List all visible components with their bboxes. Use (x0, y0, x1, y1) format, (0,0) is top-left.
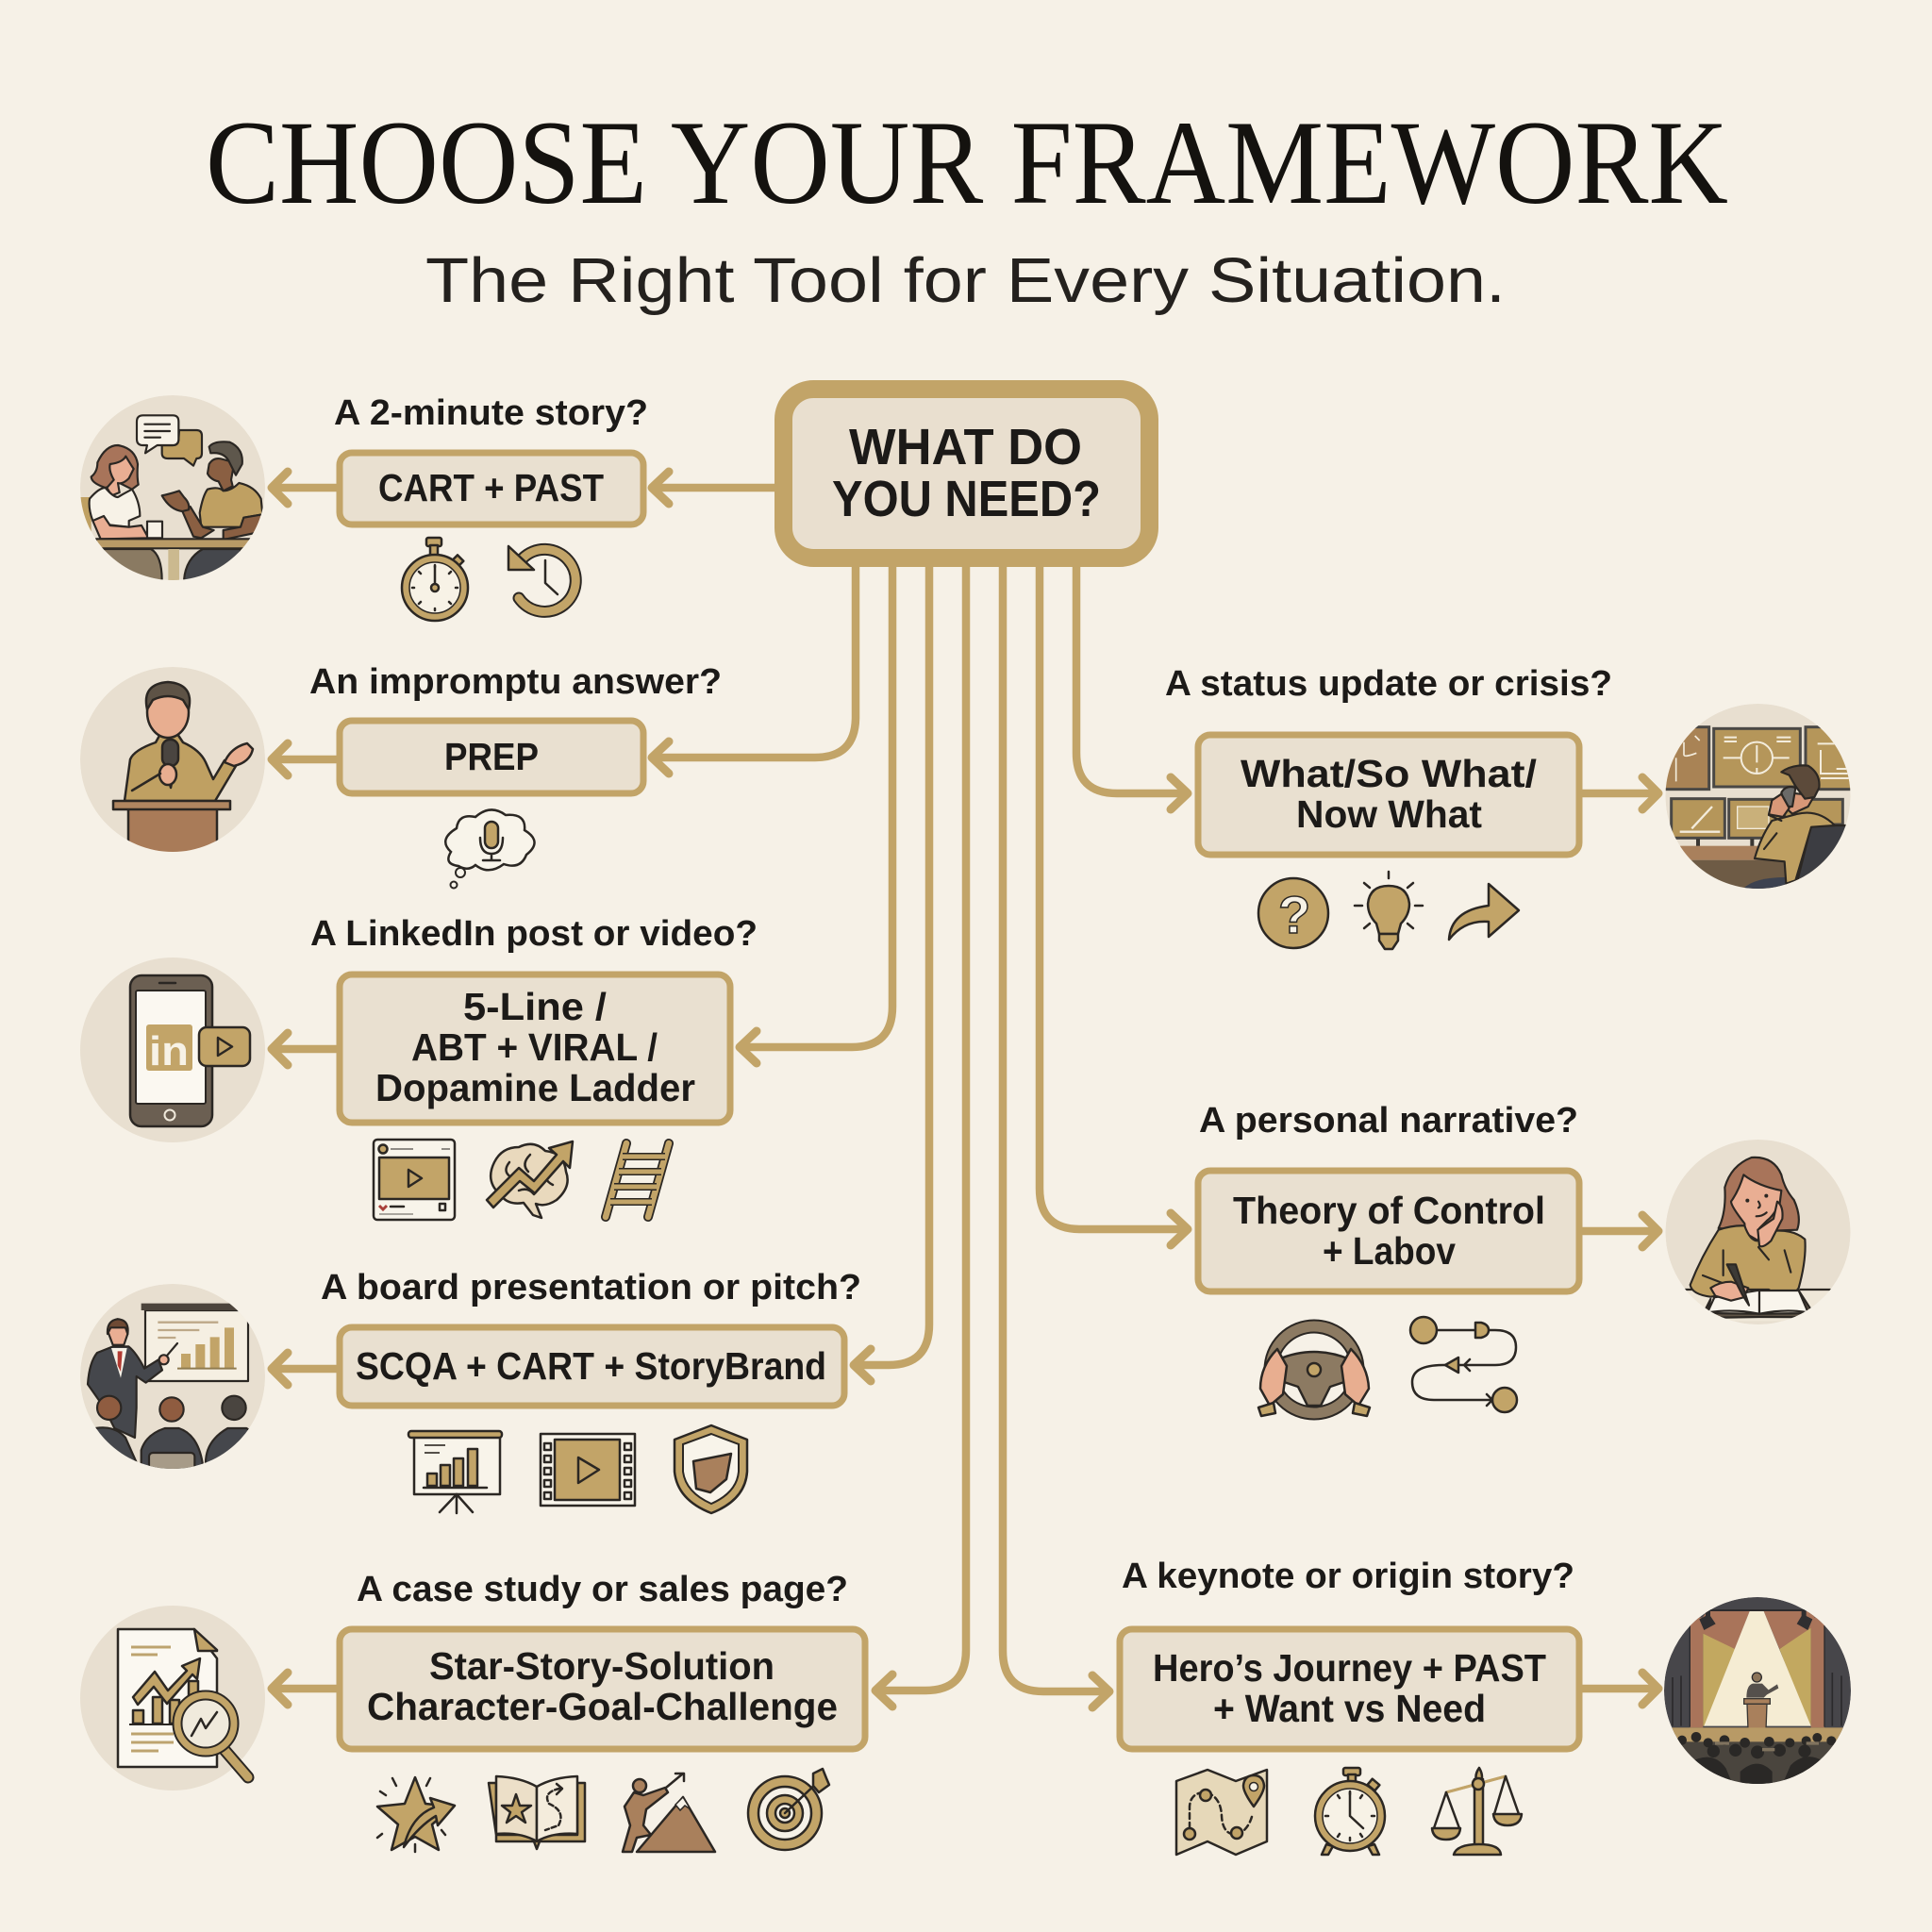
icon: ladder (606, 1143, 669, 1217)
icon: stopwatch (402, 538, 468, 621)
panel: LinkedIn post or video (80, 914, 758, 1220)
icon: question mark (1258, 878, 1328, 948)
icon: curved forward arrow (1449, 884, 1519, 940)
framework box: + Labov (1323, 1229, 1456, 1273)
framework box (1198, 1171, 1579, 1291)
icon: light bulb (1355, 872, 1423, 949)
question label: A keynote or origin story? (1122, 1557, 1574, 1596)
arrow to illustration (272, 472, 337, 504)
arrow to illustration (272, 1033, 337, 1065)
panel: board presentation or pitch (80, 1268, 861, 1513)
arrow to illustration (272, 1673, 337, 1705)
panel: keynote or origin story (1120, 1557, 1857, 1855)
illustration: woman journaling (1666, 1140, 1851, 1324)
framework box: PREP (444, 735, 539, 778)
arrow to illustration (1582, 1673, 1658, 1705)
panel: 2-minute story (78, 393, 648, 621)
panel: personal narrative (1198, 1101, 1851, 1416)
illustration: two people talking (78, 395, 265, 580)
connector: central box to PREP (652, 567, 856, 774)
question label: A LinkedIn post or video? (310, 914, 758, 954)
icon: question mark: ? (1278, 885, 1310, 944)
question label: A 2-minute story? (334, 393, 648, 433)
icon: balance scales (1432, 1768, 1522, 1855)
icon: climber on mountain (623, 1774, 715, 1852)
framework box (1120, 1629, 1579, 1749)
framework box (340, 453, 643, 525)
connector: central box to case study (875, 567, 966, 1707)
framework box: Now What (1296, 792, 1482, 836)
icon: presentation board (408, 1431, 502, 1513)
framework box: Character-Goal-Challenge (367, 1685, 838, 1728)
framework box: CART + PAST (378, 466, 604, 509)
framework box: Star-Story-Solution (429, 1644, 774, 1688)
illustration: keynote stage (1658, 1597, 1857, 1790)
framework box (340, 1327, 844, 1406)
central box: what do you need: YOU NEED? (832, 471, 1101, 527)
icon: open storybook (489, 1776, 585, 1849)
illustration: report with magnifier (80, 1606, 265, 1790)
framework box: What/So What/ (1241, 752, 1537, 795)
icon: shield with rock (675, 1425, 747, 1513)
framework box (340, 974, 730, 1123)
framework box: Theory of Control (1233, 1189, 1545, 1232)
illustration: phone with LinkedIn and video (80, 958, 265, 1142)
panel: status update or crisis (1165, 664, 1858, 949)
framework box: SCQA + CART + StoryBrand (356, 1344, 826, 1388)
connector: central box to personal narrative (1040, 567, 1188, 1245)
arrow to illustration (272, 743, 337, 775)
title: CHOOSE YOUR FRAMEWORK (206, 97, 1728, 229)
illustration: boardroom presenter (80, 1284, 265, 1473)
framework box (1198, 735, 1579, 855)
icon: thought bubble with microphone (445, 809, 535, 889)
icon: target with arrow (748, 1769, 829, 1850)
icon: film strip with play (541, 1434, 635, 1506)
connector: central box to SCQA (854, 567, 929, 1381)
framework box: 5-Line / (463, 985, 607, 1028)
connector: central box to keynote (1003, 567, 1109, 1707)
icon: star with arrow (377, 1777, 455, 1852)
illustration: speaker at podium (80, 667, 265, 856)
central box: what do you need (783, 389, 1149, 558)
question label: A status update or crisis? (1165, 664, 1612, 704)
icon: hands on steering wheel (1258, 1326, 1370, 1416)
connector: central box to status update (1076, 567, 1188, 809)
framework box: Dopamine Ladder (375, 1066, 695, 1109)
connector: central box to CART + PAST (652, 472, 774, 504)
question label: A personal narrative? (1199, 1101, 1578, 1141)
icon: narrative flow path (1410, 1317, 1517, 1412)
framework box: Hero’s Journey + PAST (1153, 1646, 1546, 1690)
framework box (340, 721, 643, 793)
illustration: phone with LinkedIn and video: in (149, 1028, 189, 1074)
framework box (340, 1629, 865, 1749)
arrow to illustration (1582, 777, 1658, 809)
illustration: crisis monitoring desk (1666, 704, 1851, 889)
framework box: ABT + VIRAL / (411, 1025, 658, 1069)
icon: rewind clock (508, 546, 575, 611)
panel: impromptu answer (80, 662, 722, 889)
question label: A case study or sales page? (357, 1570, 848, 1609)
icon: journey map (1176, 1770, 1267, 1855)
subtitle: The Right Tool for Every Situation. (425, 245, 1506, 316)
panel: case study or sales page (80, 1570, 865, 1852)
central box: what do you need: WHAT DO (849, 419, 1082, 475)
arrow to illustration (272, 1353, 337, 1385)
arrow to illustration (1582, 1215, 1658, 1247)
connector: central box to LinkedIn (740, 567, 892, 1063)
question label: An impromptu answer? (309, 662, 722, 702)
question label: A board presentation or pitch? (321, 1268, 861, 1307)
icon: alarm clock timer (1315, 1768, 1385, 1855)
icon: video post (374, 1140, 455, 1220)
icon: brain with rising arrow (487, 1141, 573, 1218)
framework box: + Want vs Need (1213, 1687, 1486, 1730)
